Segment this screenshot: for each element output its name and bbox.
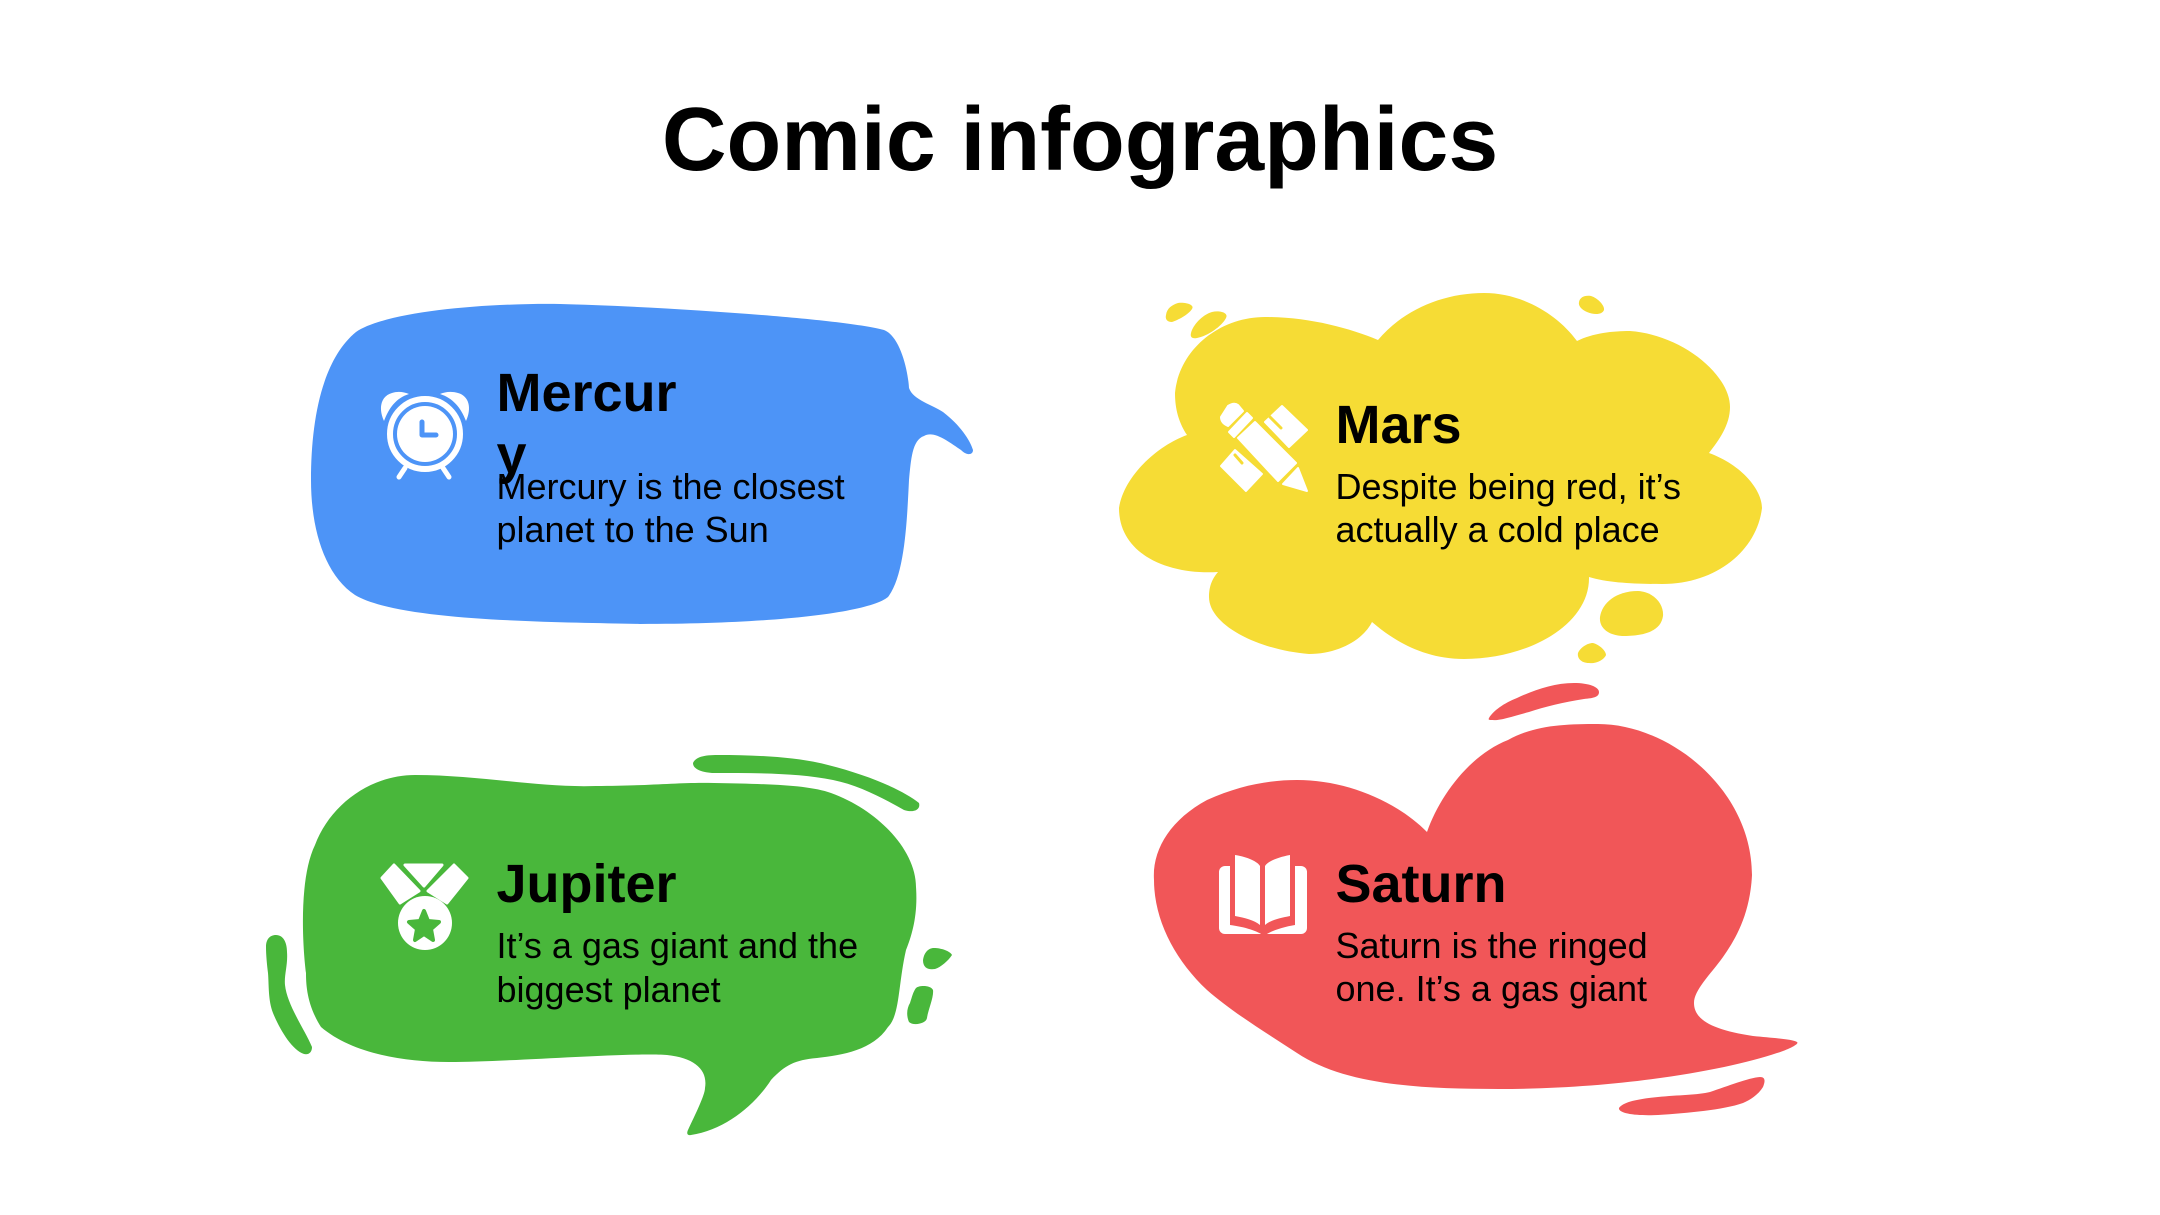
cloud puffs bbox=[1166, 296, 1663, 663]
panel: Mars bbox=[1119, 293, 1762, 663]
heading: Saturn: Saturn bbox=[1336, 854, 1507, 914]
icon: open book bbox=[1219, 855, 1307, 936]
panel: Saturn bbox=[1154, 683, 1797, 1115]
panel: Jupiter bbox=[266, 755, 952, 1135]
description: Jupiter: It’s a gas giant and the bbox=[496, 925, 858, 966]
description: Mercury: planet to the Sun bbox=[496, 509, 769, 550]
green speech bubble bbox=[303, 775, 916, 1135]
action strokes bbox=[1489, 683, 1765, 1115]
description: Mercury: Mercury is the closest bbox=[496, 466, 845, 507]
heading: Jupiter: Jupiter bbox=[496, 854, 677, 914]
icon: pencil and ruler bbox=[1221, 404, 1307, 491]
description: Mars: Despite being red, it’s bbox=[1336, 466, 1681, 507]
panel: Mercury bbox=[311, 304, 973, 624]
action strokes bbox=[266, 755, 952, 1054]
red heart-shaped bubble bbox=[1154, 724, 1797, 1089]
heading: Mercury: y bbox=[496, 425, 527, 485]
description: Saturn: one. It’s a gas giant bbox=[1336, 968, 1647, 1009]
heading: Mars: Mars bbox=[1336, 395, 1462, 455]
description: Mars: actually a cold place bbox=[1336, 509, 1660, 550]
description: Jupiter: biggest planet bbox=[496, 969, 721, 1010]
icon: medal bbox=[382, 865, 467, 950]
yellow thought cloud bbox=[1119, 293, 1762, 659]
heading: Mercury: Mercur bbox=[496, 363, 677, 423]
title: Comic infographics bbox=[662, 89, 1498, 189]
icon: alarm clock bbox=[381, 392, 469, 477]
blue speech bubble bbox=[311, 304, 973, 624]
description: Saturn: Saturn is the ringed bbox=[1336, 925, 1648, 966]
